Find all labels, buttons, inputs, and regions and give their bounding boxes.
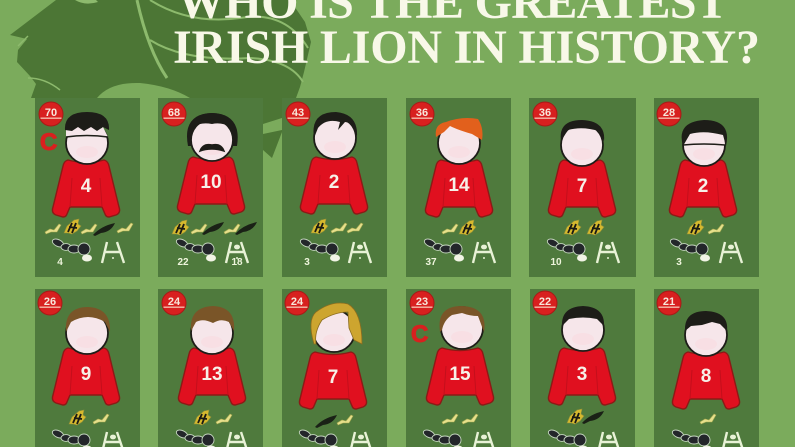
- player card 7: 26: [44, 296, 56, 308]
- player card 3: 2: [329, 172, 339, 193]
- player card 11: 3: [577, 364, 587, 385]
- player card 6: 2: [698, 176, 708, 197]
- player card 5: 10: [550, 257, 562, 268]
- player card 6: 3: [676, 257, 682, 268]
- player card 10: 23: [416, 296, 428, 308]
- player card 1: 70: [45, 107, 57, 119]
- player card 7: 9: [81, 364, 91, 385]
- player card 10: 15: [449, 364, 471, 385]
- player card 10: [406, 289, 511, 447]
- player card 6: 28: [663, 107, 675, 119]
- player card 5: [529, 98, 636, 277]
- player card 4: 37: [425, 257, 437, 268]
- player card 12: [654, 289, 759, 447]
- player card 1: 4: [81, 176, 92, 197]
- player card 9: [282, 289, 387, 447]
- player card 2: 68: [168, 107, 180, 119]
- player card 9: 24: [291, 296, 304, 308]
- title: IRISH LION IN HISTORY?: [173, 21, 760, 74]
- player card 12: 21: [663, 296, 675, 308]
- player card 8: 13: [201, 364, 223, 385]
- player card 2: 18: [231, 257, 243, 268]
- player card 11: [530, 289, 635, 447]
- player card 9: 7: [328, 367, 338, 388]
- player card 11: 22: [539, 296, 551, 308]
- player card 8: 24: [168, 296, 181, 308]
- player card 6: [654, 98, 759, 277]
- player card 1: 4: [57, 257, 63, 268]
- player card 4: [406, 98, 511, 277]
- player card 3: 43: [292, 107, 304, 119]
- player card 1: [35, 98, 140, 277]
- player card 1: C: [40, 129, 57, 156]
- player card 2: 10: [200, 172, 222, 193]
- player card 5: 7: [577, 176, 587, 197]
- player card 12: 8: [701, 366, 711, 387]
- player card 2: 22: [177, 257, 189, 268]
- player card 3: [282, 98, 387, 277]
- player card 5: 36: [539, 107, 551, 119]
- player card 4: 36: [416, 107, 428, 119]
- player card 8: [158, 289, 263, 447]
- lion illustration: [10, 0, 311, 158]
- player card 3: 3: [304, 257, 310, 268]
- player card 7: [35, 289, 140, 447]
- player card 2: [158, 98, 263, 277]
- player card 10: C: [411, 321, 428, 348]
- player card 4: 14: [448, 175, 470, 196]
